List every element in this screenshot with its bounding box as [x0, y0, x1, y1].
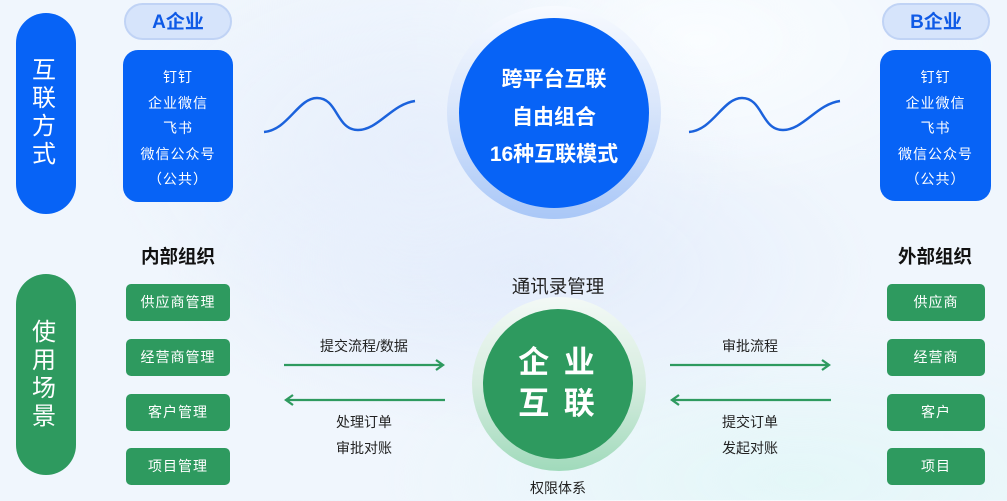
side label: interconnection method: 联	[32, 85, 56, 112]
arrow: left, right side	[670, 394, 831, 406]
label: permission system: 权限体系	[530, 480, 586, 496]
internal tag: customers	[126, 394, 230, 430]
hub text	[459, 18, 649, 208]
external tag: customers	[887, 394, 985, 430]
arrow: left, left side	[284, 394, 445, 406]
arrow: right, left side	[284, 359, 445, 371]
external tag: customers: 客户	[921, 404, 951, 420]
panel: company A platforms: 飞书	[163, 120, 193, 136]
label: submit orders and reconcile: 提交订单	[722, 414, 778, 430]
hub text: 自由组合	[512, 106, 596, 128]
panel: company A platforms	[123, 50, 233, 202]
side label: usage scenarios	[16, 274, 76, 475]
panel: company B platforms	[880, 50, 991, 201]
external tag: distributors: 经营商	[914, 349, 958, 365]
hub text: 互 联	[518, 386, 598, 421]
arrow: right, right side	[670, 359, 831, 371]
label: submit process and data: 提交流程/数据	[320, 338, 408, 354]
internal tag: projects	[126, 448, 230, 484]
hub: enterprise interconnection	[472, 297, 646, 471]
label: contact management: 通讯录管理	[512, 276, 604, 297]
wave: right connection	[688, 96, 840, 134]
side label: interconnection method: 互	[32, 57, 56, 84]
hub: cross-platform interconnection	[447, 6, 661, 219]
badge: company B: B企业	[910, 12, 962, 33]
heading: internal organizations: 内部组织	[141, 246, 215, 267]
internal tag: suppliers	[126, 284, 230, 320]
external tag: projects: 项目	[921, 458, 951, 474]
side label: usage scenarios: 场	[32, 374, 56, 402]
external tag: suppliers	[887, 284, 985, 320]
panel: company A platforms: 企业微信	[148, 94, 208, 110]
side label: interconnection method: 式	[32, 141, 56, 168]
label: submit orders and reconcile	[722, 414, 778, 456]
external tag: suppliers: 供应商	[914, 294, 958, 310]
side label: usage scenarios: 使	[32, 318, 56, 346]
side label: interconnection method	[16, 13, 76, 214]
hub text: 企 业	[518, 345, 598, 380]
panel: company A platforms: 微信公众号	[140, 146, 216, 162]
internal tag: suppliers: 供应商管理	[140, 294, 216, 310]
hub text: 16种互联模式	[490, 143, 618, 166]
external tag: distributors	[887, 339, 985, 376]
heading: external organizations: 外部组织	[898, 246, 972, 267]
panel: company A platforms: （公共）	[148, 171, 208, 187]
label: process orders and reconcile: 审批对账	[336, 440, 392, 456]
panel: company B platforms: 企业微信	[906, 94, 966, 110]
label: process orders and reconcile: 处理订单	[336, 414, 392, 430]
panel: company B platforms: 微信公众号	[898, 146, 973, 162]
hub text	[483, 309, 633, 459]
external tag: projects	[887, 448, 985, 484]
hub text: 跨平台互联	[502, 68, 606, 91]
label: approval process: 审批流程	[722, 338, 778, 354]
internal tag: distributors: 经营商管理	[140, 349, 216, 365]
side label: usage scenarios: 用	[32, 346, 56, 374]
badge: company A: A企业	[152, 12, 204, 33]
internal tag: customers: 客户管理	[148, 404, 208, 420]
panel: company A platforms: 钉钉	[163, 69, 193, 85]
internal tag: projects: 项目管理	[148, 458, 208, 474]
internal tag: distributors	[126, 339, 230, 376]
badge: company A	[124, 3, 232, 40]
panel: company B platforms: 钉钉	[920, 69, 950, 85]
wave: left connection	[264, 96, 416, 134]
side label: usage scenarios: 景	[32, 402, 56, 430]
label: submit orders and reconcile: 发起对账	[722, 440, 778, 456]
badge: company B	[882, 3, 990, 40]
panel: company B platforms: 飞书	[920, 120, 950, 136]
panel: company B platforms: （公共）	[906, 171, 966, 187]
label: process orders and reconcile	[336, 414, 392, 456]
side label: interconnection method: 方	[32, 113, 56, 140]
